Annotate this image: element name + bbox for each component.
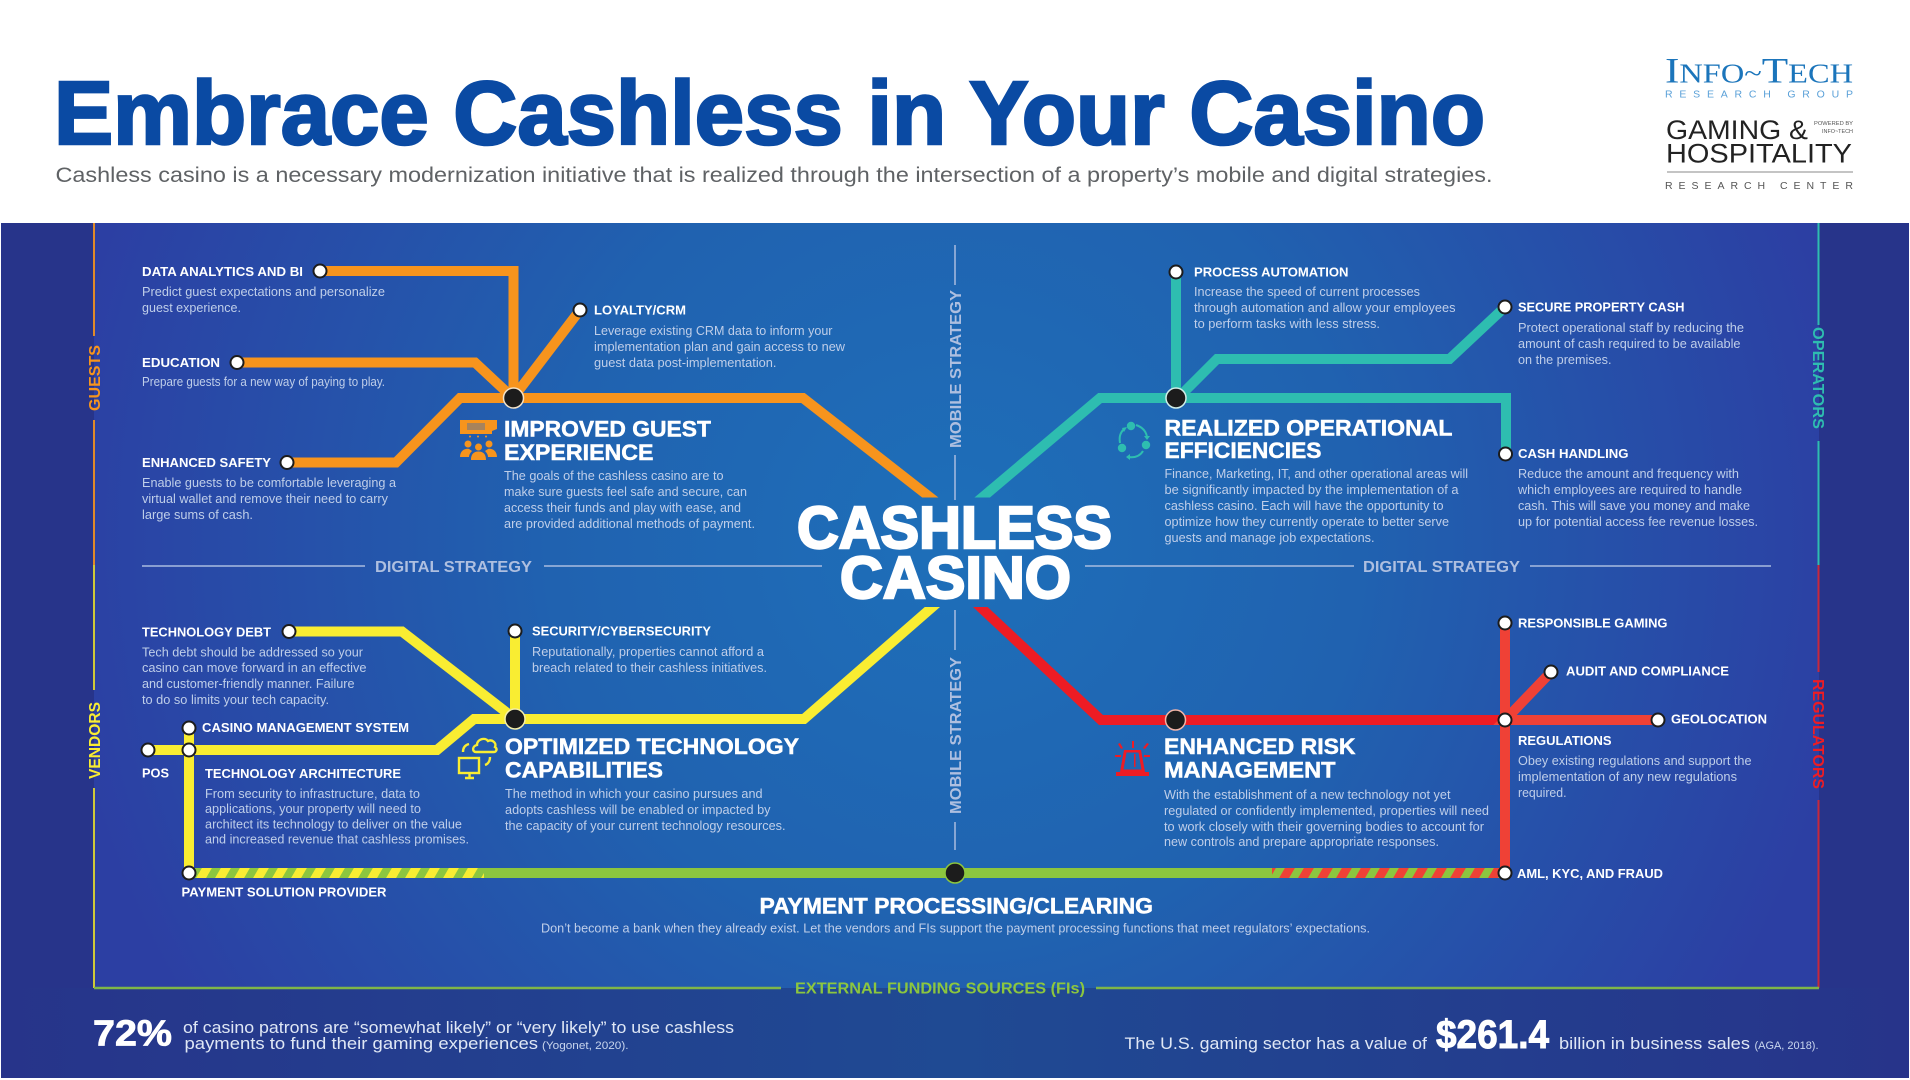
node: technology debt: to do so limits your tech capacity. (142, 693, 329, 707)
node: education: Prepare guests for a new way of paying to play. (142, 375, 385, 389)
description: Finance, Marketing, IT, and other operational areas will (1164, 467, 1468, 481)
node: responsible gaming: RESPONSIBLE GAMING (1518, 616, 1668, 630)
node: data analytics and BI (142, 264, 385, 315)
node: secure property cash: Protect operational staff by reducing the (1518, 321, 1744, 335)
heading (1164, 416, 1453, 463)
orange transit lines (237, 271, 945, 509)
node: cash handling: cash. This will save you money and make (1518, 499, 1750, 513)
node: technology debt: and customer-friendly manner. Failure (142, 677, 355, 691)
stat: 72 percent: payments to fund their gaming experiences (184, 1035, 538, 1053)
payment processing text: Don’t become a bank when they already exist. Let the vendors and FIs support the payment processing functions that meet regulators’ expectations. (541, 922, 1370, 936)
frame and stakeholder axes (87, 223, 1826, 998)
node: technology architecture (182, 744, 469, 846)
stat: gaming sector value (1124, 1013, 1818, 1057)
center title: CASHLESS (797, 495, 1112, 561)
background: inner panel (94, 223, 1819, 988)
description: to work closely with their governing bodies to account for (1164, 820, 1484, 834)
node: cash handling: up for potential access fee revenue losses. (1518, 515, 1758, 529)
description: regulated or confidently implemented, properties will need (1164, 804, 1489, 818)
logo: Gaming and Hospitality Research Center (1665, 115, 1854, 192)
panel: payment processing line (189, 868, 1505, 878)
description: The method in which your casino pursues and (505, 787, 763, 801)
heading: ENHANCED RISK (1164, 734, 1356, 759)
node: technology architecture: and increased revenue that cashless promises. (205, 832, 469, 846)
node: casino management system: CASINO MANAGEMENT SYSTEM (202, 720, 409, 735)
background: bottom band (1, 988, 1909, 1078)
stat: 72 percent: of casino patrons are “somewhat likely” or “very likely” to use cashless (183, 1019, 734, 1037)
axis: external funding sources: EXTERNAL FUNDING SOURCES (FIs) (795, 980, 1085, 998)
panel: improved guest experience (142, 264, 945, 531)
node: secure property cash: SECURE PROPERTY CASH (1518, 300, 1684, 314)
panel: enhanced risk management (960, 588, 1767, 881)
heading: REALIZED OPERATIONAL (1164, 416, 1453, 441)
title: Embrace Cashless in Your Casino (54, 64, 1485, 164)
node: regulations: Obey existing regulations and support the (1518, 754, 1752, 768)
heading (1164, 734, 1356, 783)
node: secure property cash: amount of cash required to be available (1518, 337, 1741, 351)
logo: Gaming and Hospitality Research Center: INFO~TECH (1822, 129, 1853, 135)
node: loyalty/CRM: implementation plan and gain access to new (594, 340, 846, 354)
axis: mobile strategy: MOBILE STRATEGY (948, 290, 965, 448)
description (1164, 788, 1489, 849)
stat: gaming sector value: The U.S. gaming sector has a value of (1124, 1035, 1427, 1053)
axis: regulators: REGULATORS (1809, 679, 1826, 789)
node: process automation: Increase the speed of current processes (1194, 285, 1420, 299)
axis: vendors: VENDORS (87, 702, 104, 779)
description: make sure guests feel safe and secure, can (504, 485, 747, 499)
node: enhanced safety: large sums of cash. (142, 508, 253, 522)
heading: EXPERIENCE (504, 440, 654, 465)
green line (189, 868, 1505, 878)
logo: Gaming and Hospitality Research Center: GAMING & (1666, 115, 1808, 145)
center title: CASINO (840, 545, 1071, 611)
node: regulations (1498, 714, 1752, 800)
node: regulations: required. (1518, 786, 1566, 800)
node: process automation: through automation and allow your employees (1194, 301, 1456, 315)
heading: EFFICIENCIES (1164, 438, 1322, 463)
header (54, 64, 1492, 187)
panel: realized operational efficiencies (968, 264, 1758, 545)
node: payment solution provider: PAYMENT SOLUTION PROVIDER (182, 884, 387, 900)
red hatch (1272, 868, 1505, 878)
hub (505, 709, 525, 729)
node: process automation: PROCESS AUTOMATION (1194, 264, 1348, 280)
description: access their funds and play with ease, and (504, 501, 741, 515)
description: The goals of the cashless casino are to (504, 469, 724, 483)
node: process automation (1170, 264, 1456, 331)
node: loyalty/CRM (574, 302, 846, 370)
node: regulations: implementation of any new regulations (1518, 770, 1737, 784)
payment processing text (541, 894, 1370, 936)
icon: alarm beacon (1115, 741, 1150, 776)
description: guests and manage job expectations. (1164, 531, 1374, 545)
node: education: EDUCATION (142, 355, 220, 370)
stat: 72 percent: 72% (93, 1012, 172, 1054)
node: secure property cash: on the premises. (1518, 353, 1612, 367)
node: cash handling: CASH HANDLING (1518, 446, 1628, 461)
node: geolocation: GEOLOCATION (1671, 712, 1767, 726)
node: technology debt: TECHNOLOGY DEBT (142, 624, 271, 640)
node: secure property cash (1498, 300, 1744, 367)
heading (505, 734, 799, 783)
node: data analytics and BI: guest experience. (142, 301, 241, 315)
yellow hatch (195, 868, 484, 878)
logo: Info-Tech Research Group: RESEARCH GROUP (1665, 88, 1853, 100)
node: technology architecture: TECHNOLOGY ARCHITECTURE (205, 766, 401, 781)
node: loyalty/CRM: guest data post-implementation. (594, 356, 776, 370)
background: white header (0, 0, 1910, 223)
logo: Gaming and Hospitality Research Center: HOSPITALITY (1666, 139, 1852, 169)
background: outer band (1, 223, 1909, 1078)
node: enhanced safety: ENHANCED SAFETY (142, 455, 271, 470)
axis: mobile strategy: MOBILE STRATEGY (948, 657, 965, 814)
node: cash handling: Reduce the amount and frequency with (1518, 467, 1739, 481)
hub (504, 388, 524, 408)
stat: gaming sector value: (AGA, 2018). (1754, 1040, 1818, 1052)
description (1164, 467, 1468, 545)
panel: optimized technology capabilities (142, 596, 945, 900)
node: AML, KYC and fraud: AML, KYC, AND FRAUD (1517, 866, 1663, 881)
node: data analytics and BI: Predict guest expectations and personalize (142, 285, 385, 299)
description (505, 787, 786, 833)
payment processing text: PAYMENT PROCESSING/CLEARING (760, 894, 1153, 919)
axis: mobile strategy (948, 245, 965, 850)
node: regulations: REGULATIONS (1518, 733, 1612, 748)
stat: gaming sector value: $261.4 (1436, 1013, 1550, 1057)
node: security/cybersecurity: breach related to their cashless initiatives. (532, 661, 767, 675)
node: security/cybersecurity: Reputationally, properties cannot afford a (532, 645, 764, 659)
node: cash handling (1499, 446, 1758, 529)
heading: IMPROVED GUEST (504, 416, 711, 442)
node: technology architecture: architect its technology to deliver on the value (205, 818, 462, 832)
icon: cloud and monitor (459, 739, 497, 778)
payment processing hub (945, 863, 965, 883)
description: cashless casino. Each will have the opportunity to (1164, 499, 1444, 513)
stat: 72 percent: (Yogonet, 2020). (542, 1040, 628, 1052)
heading: OPTIMIZED TECHNOLOGY (505, 734, 799, 759)
node: loyalty/CRM: LOYALTY/CRM (594, 302, 686, 318)
node: POS: POS (142, 766, 169, 780)
logo: Gaming and Hospitality Research Center: POWERED BY (1814, 121, 1854, 127)
icon: cycle (1118, 422, 1150, 460)
node: process automation: to perform tasks with less stress. (1194, 317, 1380, 331)
description: With the establishment of a new technology not yet (1164, 788, 1451, 802)
node: enhanced safety (142, 455, 396, 522)
node: audit and compliance: AUDIT AND COMPLIANCE (1566, 664, 1729, 678)
node: technology debt (142, 624, 367, 707)
yellow transit lines (148, 596, 945, 873)
description (504, 469, 755, 531)
axis: digital strategy (142, 559, 1771, 576)
description: the capacity of your current technology resources. (505, 819, 786, 833)
node: cash handling: which employees are required to handle (1517, 483, 1742, 497)
logo: Gaming and Hospitality Research Center: RESEARCH CENTER (1665, 180, 1853, 192)
node: security/cybersecurity: SECURITY/CYBERSECURITY (532, 624, 711, 638)
node: POS (142, 744, 169, 780)
hub (1166, 710, 1186, 730)
icon: screen and people (460, 420, 497, 460)
stat: 72 percent (93, 1012, 734, 1054)
node: data analytics and BI: DATA ANALYTICS AND BI (142, 264, 303, 279)
description: are provided additional methods of payment. (504, 517, 755, 531)
node: technology debt: casino can move forward in an effective (142, 661, 367, 675)
center title (797, 495, 1112, 611)
node: technology architecture: From security to infrastructure, data to (205, 787, 420, 801)
hub (1166, 388, 1186, 408)
node: education (142, 355, 385, 389)
red transit lines (960, 588, 1658, 873)
heading (504, 416, 711, 465)
node: enhanced safety: Enable guests to be comfortable leveraging a (142, 476, 396, 490)
heading: MANAGEMENT (1164, 758, 1336, 783)
logo: Info-Tech Research Group: INFO~ TECH (1665, 51, 1853, 91)
description: new controls and prepare appropriate responses. (1164, 835, 1439, 849)
heading: CAPABILITIES (505, 758, 663, 783)
node: loyalty/CRM: Leverage existing CRM data to inform your (594, 324, 832, 338)
description: adopts cashless will be enabled or impacted by (505, 803, 771, 817)
description: optimize how they currently operate to better serve (1164, 515, 1449, 529)
subtitle: Cashless casino is a necessary modernization initiative that is realized through the intersection of a property’s mobile and digital strategies. (56, 164, 1492, 187)
teal transit lines (968, 272, 1506, 510)
node: payment solution provider (182, 866, 387, 900)
stat: gaming sector value: billion in business sales (1559, 1035, 1750, 1053)
node: technology architecture: applications, your property will need to (205, 802, 421, 816)
node: security/cybersecurity (508, 624, 767, 675)
node: technology debt: Tech debt should be addressed so your (142, 646, 363, 660)
axis: digital strategy: DIGITAL STRATEGY (1363, 559, 1520, 576)
node: enhanced safety: virtual wallet and remove their need to carry (142, 492, 389, 506)
description: be significantly impacted by the implementation of a (1164, 483, 1459, 497)
axis: operators: OPERATORS (1809, 327, 1826, 429)
axis: digital strategy: DIGITAL STRATEGY (375, 559, 532, 576)
axis: guests: GUESTS (87, 345, 104, 411)
